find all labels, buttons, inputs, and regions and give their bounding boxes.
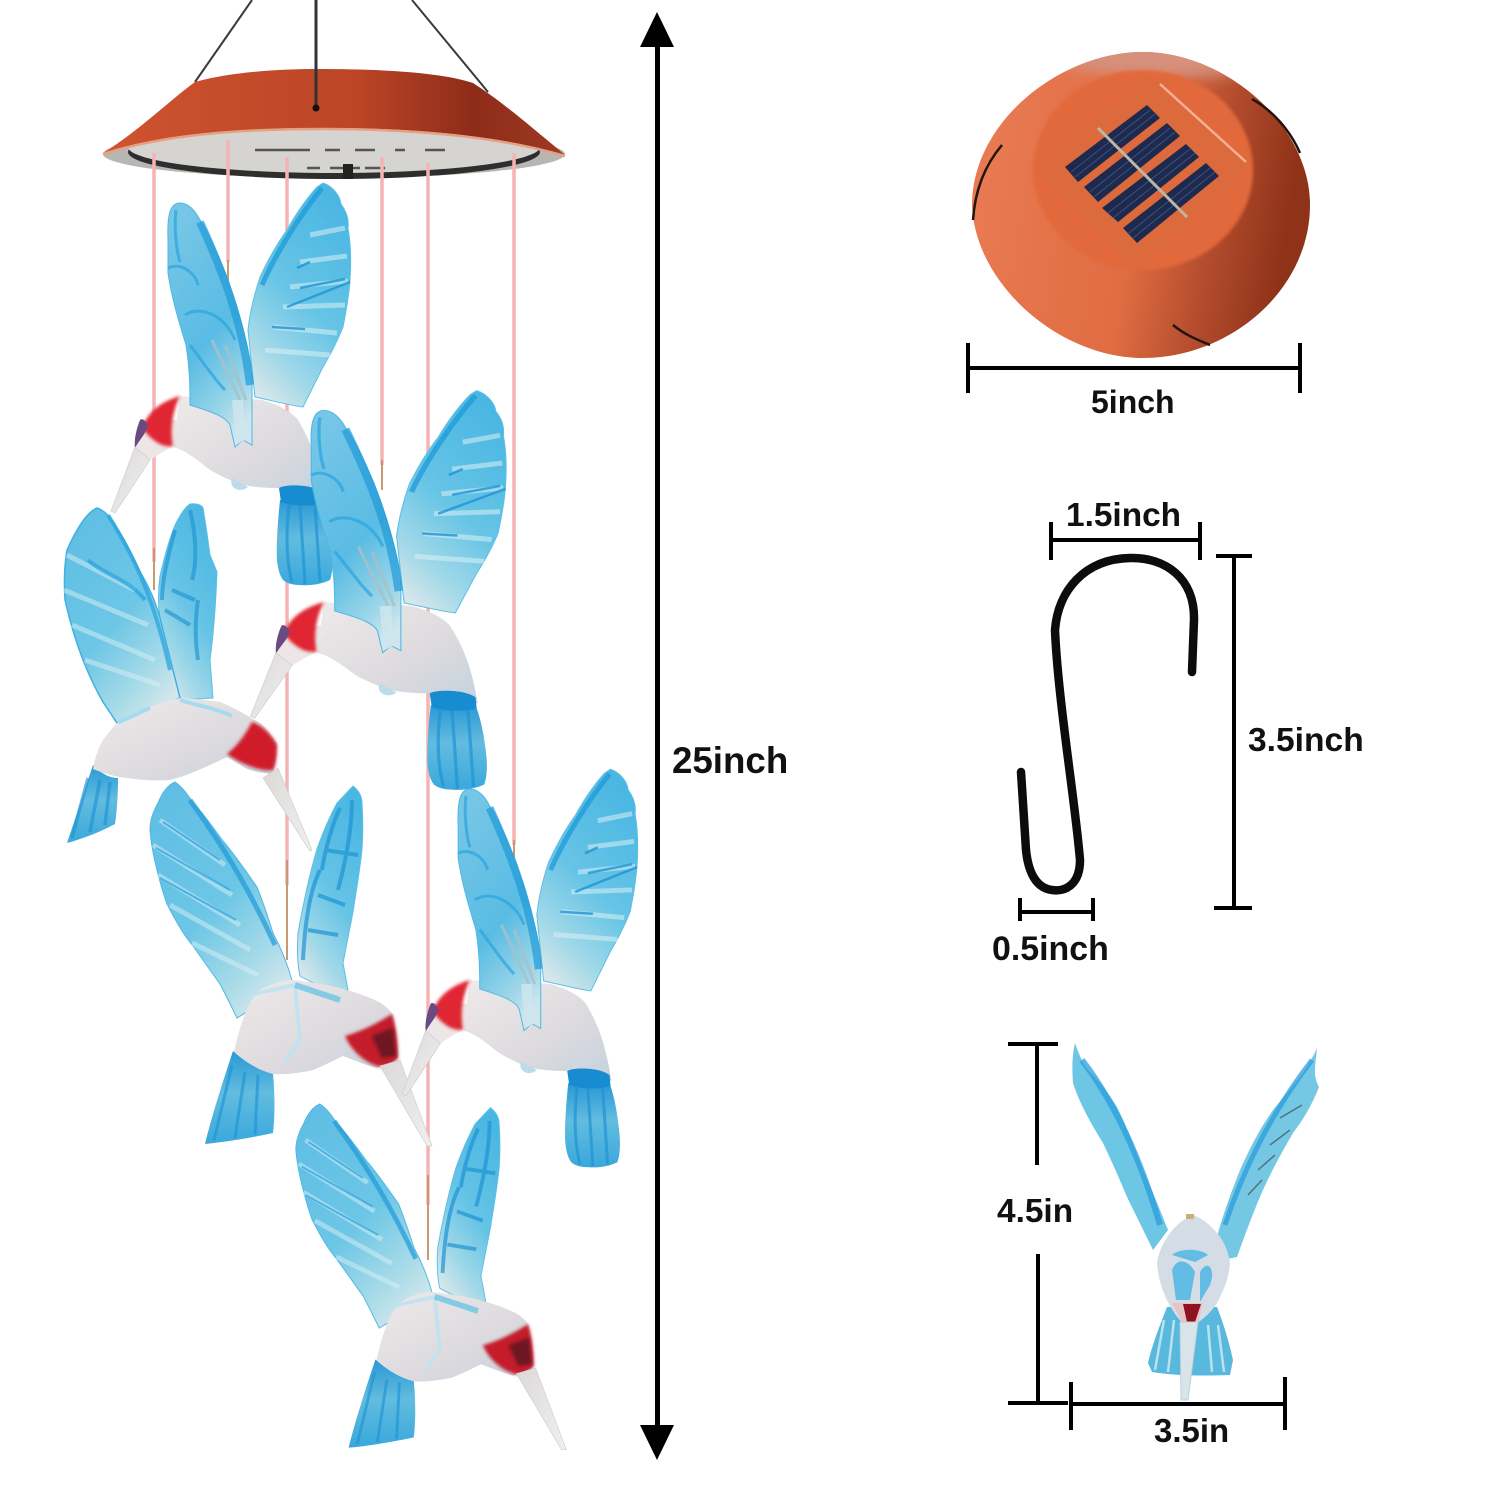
- solar cells: [1065, 105, 1219, 243]
- dimension: 3.5inch: 3.5inch: [1248, 722, 1364, 759]
- S hook: [1021, 558, 1194, 890]
- LED plate markings: [255, 150, 445, 168]
- canopy rim highlight: [103, 129, 565, 156]
- pink cords: [154, 140, 514, 1205]
- lid top tint: [1065, 52, 1236, 84]
- frame highlight: [1160, 84, 1246, 162]
- front beak: [1180, 1322, 1198, 1400]
- front hanger: [1186, 1214, 1194, 1219]
- label: 25inch: 25inch: [672, 740, 788, 781]
- cell grid lines: [1071, 110, 1215, 238]
- bird 3 head: [227, 722, 277, 770]
- front left wing: [1072, 1043, 1168, 1250]
- lid slots: [973, 99, 1300, 345]
- arrow: total height: [640, 12, 674, 1460]
- bird 3 back highlight: [118, 700, 232, 722]
- canopy outer rim: [103, 130, 565, 178]
- dimension: 1.5inch: 1.5inch: [1066, 497, 1181, 534]
- hanging strings: [195, 0, 488, 92]
- front right wing: [1218, 1048, 1319, 1260]
- bird 3 far wing feathers: [162, 510, 198, 660]
- front throat red: [1183, 1304, 1201, 1322]
- lid base: [972, 52, 1310, 358]
- bird 3 near wing: [64, 508, 180, 723]
- tan cord ends: [154, 260, 514, 1260]
- front view bird: [1072, 1043, 1319, 1400]
- dimension: 4.5in: [997, 1044, 1073, 1403]
- bird 3 body: [93, 698, 277, 780]
- solar lid top view: [972, 18, 1310, 358]
- bird 3 tail feathers: [72, 778, 110, 838]
- canopy switch: [343, 164, 353, 179]
- panel wire: [1098, 128, 1187, 217]
- bird 3 beak: [263, 768, 312, 851]
- bird 4: [150, 782, 432, 1146]
- dimension: 3.5inch: [1214, 556, 1364, 908]
- canopy underside LED plate: [128, 121, 540, 173]
- bird 1: [111, 183, 351, 585]
- front throat: [1172, 1303, 1203, 1327]
- raised circle: [1033, 70, 1253, 270]
- dimension: 4.5in: 4.5in: [997, 1193, 1073, 1230]
- canopy hole wire: [314, 0, 318, 107]
- front body: [1157, 1215, 1230, 1323]
- dimension: 1.5inch: [1051, 497, 1200, 560]
- canopy hole: [312, 104, 320, 112]
- canopy shell: [103, 69, 565, 155]
- dimension: 5inch: [968, 343, 1300, 420]
- front right wing feather lines: [1248, 1105, 1302, 1195]
- front left wing spine: [1082, 1060, 1160, 1225]
- bird 6: [296, 1104, 566, 1450]
- solar canopy: [103, 0, 565, 179]
- bird 2: [250, 391, 506, 790]
- dimension: 5inch: 5inch: [1091, 384, 1175, 420]
- front right wing spine: [1225, 1060, 1312, 1225]
- dimension: 0.5inch: 0.5inch: [992, 930, 1109, 968]
- front tail: [1148, 1307, 1233, 1376]
- canopy dark inner crescent: [128, 125, 540, 179]
- front body blue patches: [1172, 1250, 1212, 1302]
- front tail feathers: [1155, 1320, 1224, 1372]
- bird 3 wing spine: [88, 515, 170, 670]
- bird 3 tail: [67, 765, 118, 843]
- dimension: 0.5inch: [992, 898, 1109, 968]
- dimension: 3.5in: 3.5in: [1154, 1412, 1229, 1449]
- bird 5: [402, 769, 638, 1167]
- bird 3 wing feathers: [64, 555, 160, 685]
- bird 3: [64, 504, 312, 851]
- solar panel frame: [1037, 77, 1247, 267]
- bird 3 far wing: [158, 504, 217, 700]
- dimension: 3.5in: [1071, 1377, 1285, 1449]
